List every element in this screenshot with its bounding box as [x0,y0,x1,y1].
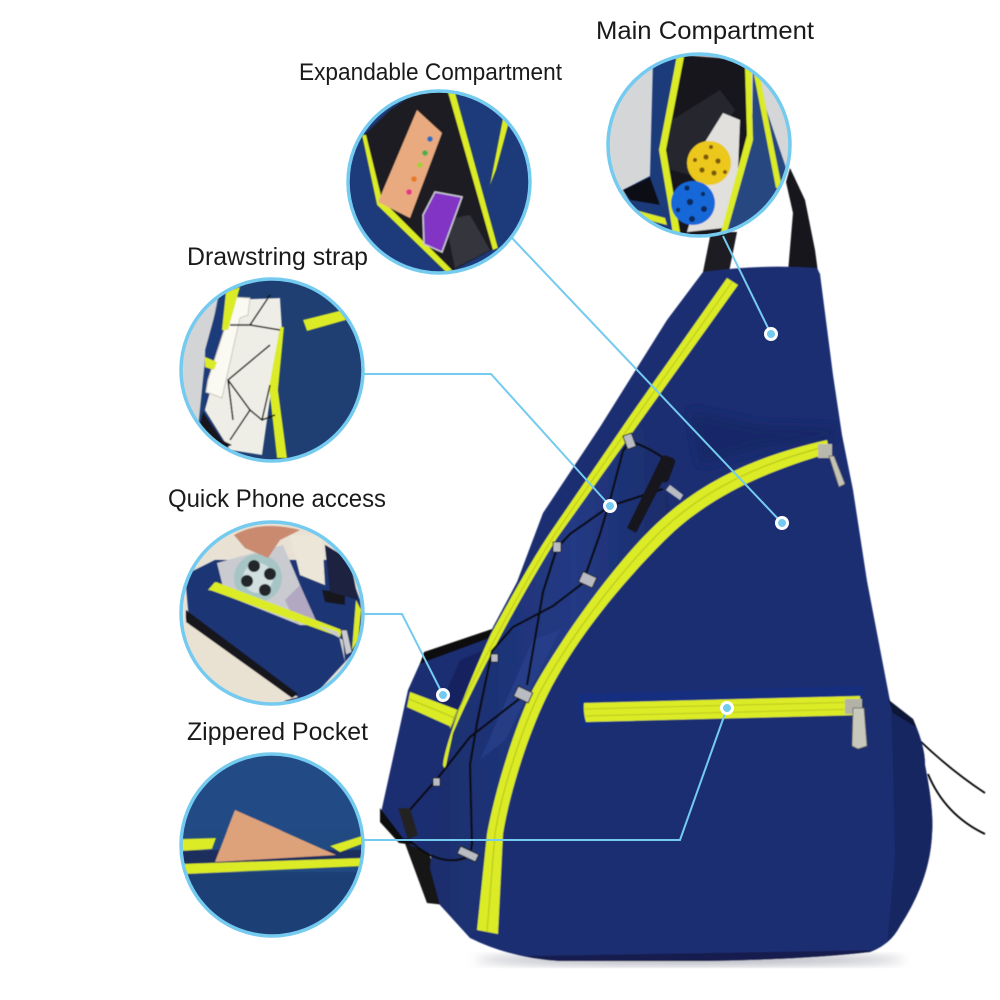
callout: expandable compartment [347,90,531,274]
phone [217,545,318,625]
leader lines [364,236,782,840]
reflective cord loops [433,433,636,862]
title: Zippered Pocket: Zippered Pocket [187,718,368,746]
pickleball: yellow [687,141,731,185]
bag shading [470,410,940,966]
callout: drawstring strap [175,270,364,462]
curved zipper pull [818,444,845,487]
lower strap buckle [398,808,418,840]
upper main zipper [443,278,738,770]
callout: main compartment [607,53,791,237]
tan card [378,110,442,218]
back strap [403,838,445,905]
title: Main Compartment: Main Compartment [596,17,814,45]
marker dots [438,328,788,714]
top handle strap [703,168,818,272]
callout: quick phone access [178,521,365,710]
main bag body [430,267,932,961]
tan card in pocket [215,810,336,862]
pickleball: blue [671,181,715,225]
title: Expandable Compartment: Expandable Compartment [299,59,562,86]
horizontal zippered pocket [577,686,867,749]
hand [234,526,300,558]
water bottle [205,298,282,455]
title: Quick Phone access: Quick Phone access [168,485,386,513]
callout: zippered pocket [180,753,365,940]
purple case [423,192,462,252]
side pocket [380,629,498,860]
right side drawcord [917,738,985,834]
side gusset panel [430,420,670,935]
bag ground shadow [475,956,905,964]
elastic drawcord [407,441,668,860]
cord lock [627,454,683,533]
product: sling bag [380,168,985,966]
front curved zipper [477,440,830,934]
title: Drawstring strap: Drawstring strap [187,243,368,271]
fabric fold highlights [480,630,560,760]
